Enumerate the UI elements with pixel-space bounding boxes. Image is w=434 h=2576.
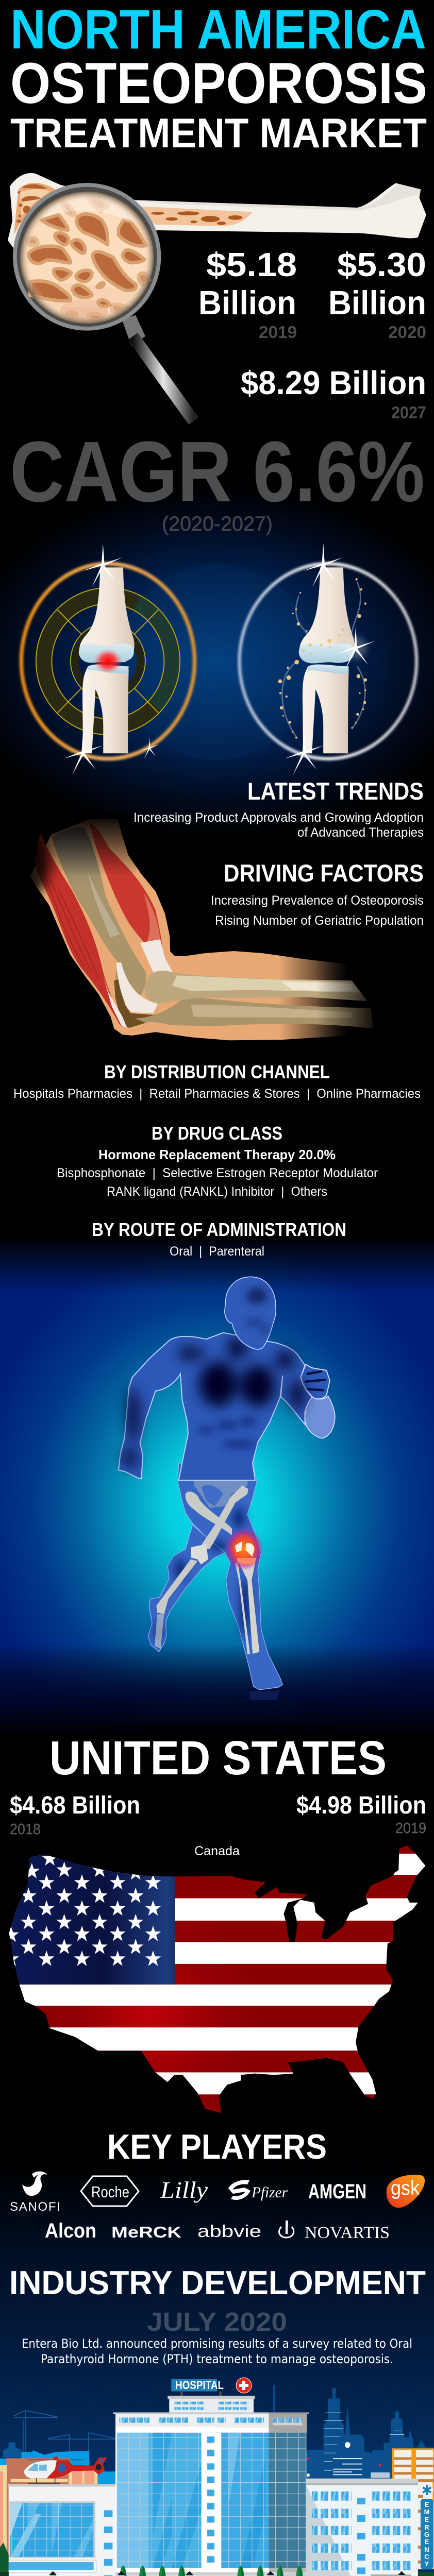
emergency label [424,2501,429,2568]
by distribution channel: Hospitals Pharmacies | Retail Pharmacies & Stores | Online Pharmacies [13,1087,421,1101]
hospital sign [175,2379,224,2396]
bone marrow: head [14,183,56,235]
runner panel background [0,1236,434,1735]
heading: United States: UNITED STATES [49,1731,387,1785]
logo: GSK: gsk [391,2177,420,2199]
by drug class [57,1123,378,1199]
stat: US 2018: $4.68 Billion [10,1792,140,1819]
stars [3,1850,161,1966]
emergency label: R [424,2523,429,2531]
reflection [249,1691,280,1700]
heading: Industry Development: INDUSTRY DEVELOPMENT [9,2264,426,2301]
stat: 2027 market size: $8.29 Billion [241,364,426,401]
sparkles [285,544,375,775]
gold particles [278,578,367,739]
skin silhouette [30,819,348,1040]
logo: Merck: MeRCK [111,2223,182,2241]
logo: Novartis: NOVARTIS [305,2224,390,2242]
left wing [7,2484,117,2576]
by drug class: BY DRUG CLASS [152,1123,282,1144]
by route of administration [92,1219,346,1259]
bones [79,567,135,753]
torso and arms [119,1333,312,1480]
swirl lines [282,582,365,738]
radar target [36,588,180,735]
stat: US 2019: 2019 [395,1820,426,1837]
tower glass [117,2433,202,2568]
orange building [392,2448,434,2569]
lens [13,183,161,331]
cranes [14,2411,117,2459]
stat: 2019 market size: Billion [198,284,296,321]
skyline [0,2450,117,2485]
heading: Key Players: KEY PLAYERS [107,2127,327,2166]
illustration: healed knee joint [240,544,416,775]
cartilage [299,643,354,673]
emergency label: M [424,2508,429,2516]
emergency label: Y [425,2560,429,2568]
latest trends [133,777,424,840]
stat: 2020 market size: 2020 [388,323,426,342]
main tower, left [113,2396,217,2576]
logos: key players [10,2172,425,2242]
icon: red cross [236,2378,252,2393]
stat: 2027 market size [241,364,426,422]
by route of administration: Oral | Parenteral [170,1244,264,1259]
apartment blocks [0,2458,97,2556]
logo: Lilly: Lilly [160,2177,208,2203]
muscle: left [35,833,128,1028]
fence [419,2572,434,2576]
emergency label: C [424,2553,429,2561]
head [225,1277,276,1349]
stat: 2027 market size: 2027 [391,403,426,422]
driving factors: Rising Number of Geriatric Population [215,913,424,928]
injury glow [94,649,122,674]
forearm fade [316,948,380,1041]
by drug class: Bisphosphonate | Selective Estrogen Receptor Modulator [57,1166,378,1180]
emergency wing [306,2479,418,2576]
forearm [305,1396,335,1438]
orange ring [21,564,195,759]
skeleton: pelvis [191,1453,249,1508]
helicopter [24,2456,107,2483]
logo: Sanofi [10,2172,60,2214]
CAGR heading: (2020-2027) [162,513,273,535]
emergency label: E [425,2516,429,2523]
bone marrow: shaft [138,206,253,226]
stat: 2020 market size: $5.30 [337,246,426,283]
logo: Alcon: Alcon [45,2219,96,2242]
development text [22,2336,412,2366]
illustration: damaged knee joint [21,544,195,775]
logo: Novartis [279,2221,390,2242]
skeleton: front leg bones [186,1492,259,1654]
front leg [178,1462,282,1690]
by drug class: RANK ligand (RANKL) Inhibitor | Others [107,1184,327,1199]
lower background gradient [0,2164,434,2452]
bones [299,567,355,753]
illustration: elbow anatomy [6,814,380,1042]
label: Canada: Canada [194,1844,240,1858]
by route of administration: BY ROUTE OF ADMINISTRATION [92,1219,346,1240]
torso shading [123,1338,304,1467]
legs [148,1453,282,1700]
tower glass [221,2433,306,2568]
humerus [52,827,146,998]
torso, arms and head [119,1277,335,1480]
illustration: running man with knee pain [119,1277,335,1700]
city skyline [273,2385,434,2479]
stat: 2019 market size [198,246,297,342]
main tower, right [214,2396,309,2576]
logo: AbbVie: abbvie [197,2222,261,2241]
logo: Pfizer [228,2180,288,2201]
stripes [0,1839,432,2122]
radius [144,971,368,1004]
by distribution channel: BY DISTRIBUTION CHANNEL [104,1061,330,1082]
dark fossa [114,978,168,1028]
by distribution channel [13,1061,421,1101]
face shading [246,1288,269,1334]
logo: Amgen: AMGEN [308,2180,366,2203]
logo: GSK [387,2175,425,2208]
ulna [134,998,373,1029]
stat: 2019 market size: $5.18 [206,246,297,283]
left edge fade [6,833,49,898]
emergency label: G [424,2531,429,2538]
bone [8,173,426,249]
development text: Parathyroid Hormone (PTH) treatment to manage osteoporosis. [41,2352,393,2366]
tendons [104,939,174,1028]
upper arm fade [25,814,137,876]
latest trends: Increasing Product Approvals and Growing Adoption [133,810,424,825]
emergency label: E [425,2501,429,2509]
lower sky [0,2452,434,2576]
illustration: hospital scene, left half [0,2379,217,2576]
illustration: hospital scene, right half [214,2385,434,2576]
skin fade [279,948,348,1042]
stat: 2020 market size [328,246,426,342]
knee pain glow [225,1528,263,1570]
knee background glow [0,487,434,837]
emergency sign [421,2483,433,2569]
latest trends: of Advanced Therapies [297,825,424,840]
hospital sign left [171,2379,217,2392]
street lamps [43,2571,199,2576]
sparkles [64,544,159,775]
logo: Roche [81,2176,139,2206]
logo: Roche: Roche [91,2183,129,2201]
driving factors [211,859,424,928]
magnifier handle [122,315,194,421]
skeleton: rear leg bones [155,1485,248,1649]
canton [9,1855,175,1985]
stat: US 2018: 2018 [10,1821,41,1838]
street lamps [261,2571,412,2576]
stat: US 2018 [10,1792,140,1838]
logo: Pfizer: Pfizer [251,2184,288,2201]
logo: Sanofi: SANOFI [10,2200,60,2214]
by drug class: Hormone Replacement Therapy 20.0% [98,1147,336,1162]
rear leg [148,1525,225,1652]
emergency label: E [425,2538,429,2546]
cartilage [79,643,134,673]
stat: US 2019 [296,1792,426,1837]
illustration: femur bone under magnifying glass [8,173,426,421]
stat: 2020 market size: Billion [328,284,426,321]
leg shading [154,1508,250,1642]
fist [301,1364,330,1399]
stat: 2019 market size: 2019 [259,323,297,342]
emergency label: N [424,2546,429,2553]
tree and fence [0,2543,9,2576]
date: July 2020: JULY 2020 [147,2307,287,2336]
muscle: right [89,823,163,955]
map: USA flag [0,1839,432,2122]
hospital sign: HOSPITAL [175,2379,224,2392]
driving factors: Increasing Prevalence of Osteoporosis [211,893,424,908]
title [10,0,427,157]
humerus highlight [88,872,120,938]
white ring [240,564,416,759]
left wing glass [9,2501,95,2558]
